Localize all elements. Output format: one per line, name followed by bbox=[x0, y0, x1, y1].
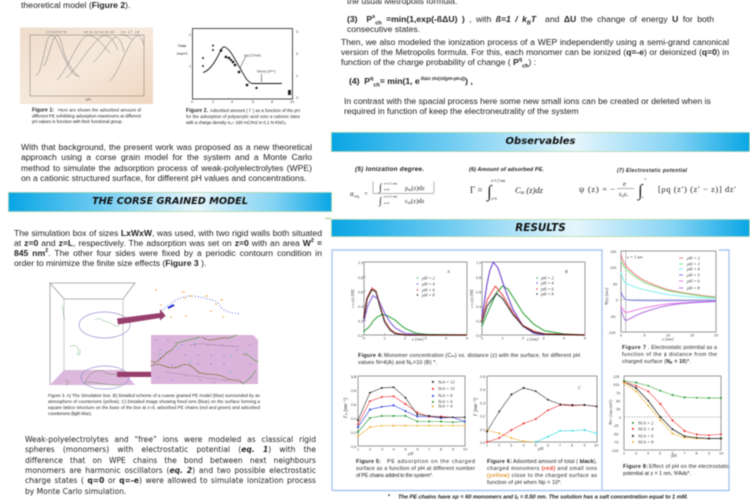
chart: figure 4B monomer concentration: B bbox=[565, 269, 568, 274]
chart: figure 7 electrostatic potential vs distance: 15 bbox=[690, 334, 694, 338]
figure 2: adsorbed amount vs pH plot: 4 bbox=[231, 100, 233, 104]
chart: figure 4A monomer concentration: 1.0 bbox=[358, 261, 363, 265]
chart: figure 4B monomer concentration: 0.6 bbox=[476, 290, 481, 294]
chart: figure 4B monomer concentration: 0.8 bbox=[476, 276, 481, 280]
heading: observables bbox=[331, 132, 750, 152]
figure 1: adsorption maxima plot: 1 2 3 4 5 6 7 8 bbox=[46, 30, 66, 34]
figure 2: adsorbed amount vs pH plot: 2 bbox=[296, 52, 298, 56]
chart: figure 6 adsorbed amount of charge: 6 bbox=[547, 444, 549, 448]
text: simulation box paragraph: The simulation box of sizes LxWxW, was used, with two rigid walls both situated bbox=[14, 228, 322, 238]
observable formula 5: ionization degree: ρ bbox=[405, 185, 408, 192]
chart: figure 4B monomer concentration: 3 bbox=[542, 336, 545, 340]
results frame bbox=[332, 250, 729, 490]
chart: figure 4A monomer concentration: pH = 2 bbox=[421, 276, 436, 280]
chart: figure 5 PE adsorption: 0.8 bbox=[351, 389, 356, 393]
observable formula 6: adsorbed PE bbox=[469, 167, 544, 202]
observable formula 7: electrostatic potential: z bbox=[642, 195, 644, 199]
chart: figure 4A monomer concentration: 3 bbox=[424, 336, 427, 340]
figure 2: adsorbed amount vs pH plot: 3 bbox=[296, 30, 298, 34]
observable formula 5: ionization degree: (z)dz bbox=[411, 185, 425, 192]
pink surface detail bbox=[151, 335, 258, 384]
figure 2 caption bbox=[186, 108, 301, 125]
chart: figure 8 potential vs pH: 8 bbox=[696, 452, 698, 456]
chart: figure 4A monomer concentration: pH = 8 bbox=[421, 292, 436, 298]
chart: figure 8 potential vs pH: -pH bbox=[670, 453, 678, 458]
chart: figure 8 potential vs pH: -25 bbox=[613, 424, 618, 428]
chart: figure 6 adsorbed amount of charge: 2 bbox=[498, 444, 500, 448]
chart: figure 4A monomer concentration: 0.0 bbox=[358, 334, 363, 338]
chart: figure 6 adsorbed amount of charge: 0.4 bbox=[480, 388, 485, 392]
chart: figure 4B monomer concentration: pH = 6 bbox=[540, 286, 555, 292]
text: small ions paragraph bbox=[344, 96, 712, 116]
chart: figure 4B monomer concentration: 0 bbox=[481, 336, 483, 340]
chart: figure 4B monomer concentration: pH = 2 bbox=[540, 276, 555, 280]
chart: figure 6 adsorbed amount of charge: Γ [nm⁻²] bbox=[473, 398, 479, 417]
chart: figure 6 adsorbed amount of charge: 1 bbox=[486, 444, 488, 448]
chart: figure 4A monomer concentration: 0.2 bbox=[358, 320, 363, 324]
chart: figure 8 potential vs pH: 125 bbox=[613, 375, 619, 379]
observable formula 6: adsorbed PE: z=0 bbox=[491, 197, 497, 201]
figure 2: adsorbed amount vs pH plot: 1 bbox=[189, 64, 191, 68]
chart: figure 8 potential vs pH: -100 bbox=[611, 449, 619, 453]
chart: figure 4B monomer concentration bbox=[469, 261, 586, 342]
observable formula 5: ionization degree: ∫ bbox=[378, 182, 383, 194]
text: simulation box paragraph: 845 nm2. The other four sides were fixed by a periodic contourn condition in bbox=[14, 248, 322, 258]
figure 3 caption bbox=[48, 393, 261, 416]
chart: figure 5 PE adsorption: 9 bbox=[452, 448, 454, 452]
chart: figure 6 adsorbed amount of charge: 4 bbox=[522, 444, 525, 448]
text: simulation box paragraph: order to minimize the finite size effects (Figure 3 ). bbox=[14, 258, 206, 268]
figure 6 caption bbox=[487, 459, 598, 486]
chart: figure 8 potential vs pH: 10 bbox=[719, 452, 723, 456]
chart: figure 7 electrostatic potential vs distance: pH = 6 bbox=[686, 278, 701, 284]
chart: figure 8 potential vs pH: 75 bbox=[616, 392, 620, 396]
chart: figure 6 adsorbed amount of charge: 0.5 bbox=[480, 375, 485, 379]
observable formula 5: ionization degree: z=2.5 nm bbox=[384, 182, 398, 186]
chart: figure 4A monomer concentration: 2 bbox=[404, 336, 406, 340]
text: weak polyelectrolytes paragraph bbox=[24, 435, 316, 496]
figure 7 caption: charged surface (Nₚ = 10)*. bbox=[622, 359, 691, 365]
text: simulation box paragraph bbox=[14, 228, 322, 268]
chart: figure 4B monomer concentration: 1.0 bbox=[476, 261, 481, 265]
text: ionization process paragraph bbox=[340, 36, 730, 70]
chart: figure 4A monomer concentration: 0.4 bbox=[358, 305, 363, 309]
text: present work paragraph: With that background, the present work was proposed as a new theoretical bbox=[21, 142, 312, 152]
figure 6 caption: charged monomers (red) and small ions bbox=[487, 466, 597, 472]
chart: figure 5 PE adsorption: 7 bbox=[428, 448, 430, 452]
chart: figure 4A monomer concentration: 0.6 bbox=[358, 290, 363, 294]
chart: figure 7 electrostatic potential vs distance: 150 bbox=[610, 250, 616, 254]
text: simulation box paragraph: at z=0 and z=L, respectively. The adsorption was set on z=0 with an area W2 = bbox=[14, 238, 322, 248]
chart: figure 4A monomer concentration: 4 bbox=[445, 336, 447, 340]
chart: figure 4B monomer concentration: 4 bbox=[563, 336, 565, 340]
equation 3: consecutive states. bbox=[347, 24, 420, 34]
figure 8 caption: Effect of pH on the electrostatic bbox=[649, 464, 729, 470]
figure 6 caption: Adsorbed amount of total ( black), bbox=[513, 459, 598, 465]
observable formula 6: adsorbed PE: (6) Amount of adsorbed PE. bbox=[469, 167, 544, 173]
chart: figure 6 adsorbed amount of charge: 0.0 bbox=[480, 441, 485, 445]
chart: figure 8 potential vs pH: -50 bbox=[613, 432, 618, 436]
chart: figure 8 potential vs pH: 25 bbox=[616, 408, 620, 412]
observable formula 5: ionization degree: m bbox=[408, 200, 412, 205]
chart: figure 5 PE adsorption: Γₚ [nm⁻²] bbox=[343, 398, 349, 419]
chart: figure 4A monomer concentration: pH = 4 bbox=[421, 282, 436, 286]
figure 6 caption: function of pH when Np = 10*. bbox=[487, 480, 562, 486]
chart: figure 5 PE adsorption: 10 bbox=[463, 448, 467, 452]
chart: figure 8 potential vs pH: 7 bbox=[684, 452, 686, 456]
figure 2: adsorbed amount vs pH plot: 2 bbox=[212, 100, 214, 104]
observable formula 5: ionization degree: m bbox=[408, 187, 412, 192]
figure 5 caption: Figure 5: bbox=[356, 459, 381, 465]
figure 5 caption: of PE chains added to the system*. bbox=[356, 473, 433, 479]
chart: figure 5 PE adsorption: 8 bbox=[440, 448, 442, 452]
chart: figure 7 electrostatic potential vs distance: 0 bbox=[616, 298, 618, 302]
chart: figure 5 PE adsorption: Nch = 12 bbox=[437, 380, 455, 384]
observable formula 5: ionization degree: z=0 bbox=[384, 188, 390, 192]
figure 2 caption: Adsorbed amount ( Γ ) as a function of the pH bbox=[210, 108, 300, 113]
chart: figure 7 electrostatic potential vs distance: z = 1 nm bbox=[626, 254, 643, 260]
chart: figure 4B monomer concentration: pH = 8 bbox=[540, 292, 555, 296]
chart: figure 7 electrostatic potential vs distance: pH = 2 bbox=[686, 256, 701, 260]
observable formula 6: adsorbed PE: ∫ bbox=[486, 182, 493, 202]
observable formula 5: ionization degree bbox=[350, 166, 434, 207]
figure 5 caption: surface as a function of pH at different number bbox=[356, 466, 475, 472]
chart: figure 4A monomer concentration: pH = 6 bbox=[421, 288, 436, 292]
chart: figure 5 PE adsorption: 2 bbox=[369, 448, 371, 452]
figure 1: adsorption maxima plot: 16 17 18 bbox=[121, 30, 139, 34]
text: present work paragraph: method to simulate the adsorption process of weak-polyelectrolytes (WPE) bbox=[21, 163, 312, 173]
chart: figure 8 potential vs pH: NCh = 6 bbox=[637, 434, 654, 438]
chart: figure 8 potential vs pH bbox=[608, 375, 723, 458]
chart: figure 7 electrostatic potential vs distance: -50 bbox=[610, 315, 616, 319]
chart: figure 8 potential vs pH: 0 bbox=[619, 416, 621, 420]
observable formula 5: ionization degree: eq. bbox=[354, 194, 360, 198]
figure 3 caption: atmosphere of counterions (yellow). C) Detailed image showing fixed ions (blue) on the surface forming a bbox=[48, 399, 261, 404]
chart: figure 4B monomer concentration: 0.4 bbox=[476, 305, 481, 309]
figure 4 caption: Figure 4: bbox=[358, 353, 383, 359]
chart: figure 4B monomer concentration: cₘ (z) [M] bbox=[469, 289, 474, 308]
chart: figure 4B monomer concentration: 0.0 bbox=[476, 334, 481, 338]
chart: figure 5 PE adsorption: Nch = 4 bbox=[437, 404, 453, 408]
chart: figure 5 PE adsorption: 3 bbox=[381, 448, 383, 452]
figure 2: adsorbed amount vs pH plot: exp (Γmax) bbox=[244, 54, 261, 58]
figure 2: adsorbed amount vs pH plot: 0 bbox=[296, 96, 298, 100]
chart: figure 7 electrostatic potential vs distance: 100 bbox=[610, 266, 616, 270]
observable formula 5: ionization degree: z=2.5 nm bbox=[384, 194, 398, 198]
chart: figure 5 PE adsorption: 1.0 bbox=[351, 375, 356, 379]
figure 2 caption: with a charge density σ₀= 160 mC/m2 in 0.1 N KNO₃ bbox=[186, 120, 286, 125]
figure 1: adsorption maxima plot: pH bbox=[86, 98, 91, 102]
figure 3: simulation box schematic bbox=[50, 283, 258, 389]
observable formula 7: electrostatic potential: − bbox=[610, 184, 615, 194]
figure 1 caption: different PE exhibiting adsorption maximums at different bbox=[32, 114, 142, 118]
observable formula 7: electrostatic potential: e bbox=[623, 180, 626, 188]
observable formula 5: ionization degree: c bbox=[405, 198, 408, 205]
chart: figure 8 potential vs pH: 3 bbox=[635, 452, 637, 456]
chart: figure 6 adsorbed amount of charge: 5 bbox=[534, 444, 537, 448]
chart: figure 4A monomer concentration: 1 bbox=[384, 336, 386, 340]
chart: figure 8 potential vs pH: -75 bbox=[613, 440, 618, 444]
text: present work paragraph: on a cationic structured surface, for different pH values and concentrations. bbox=[21, 173, 307, 183]
figure 8 caption bbox=[623, 464, 729, 477]
figure 6 caption: (yellow) close to the charged surface as bbox=[487, 473, 597, 479]
figure 2: adsorbed amount vs pH plot bbox=[177, 28, 298, 104]
chart: figure 5 PE adsorption: pH bbox=[407, 451, 414, 456]
chart: figure 5 PE adsorption: 6 bbox=[416, 448, 419, 452]
figure 1: adsorption maxima plot bbox=[20, 28, 153, 104]
chart: figure 7 electrostatic potential vs distance: pH = 3 bbox=[686, 262, 701, 266]
figure 2 caption: Figure 2. bbox=[186, 108, 209, 114]
figure 2: adsorbed amount vs pH plot: 0 bbox=[191, 100, 193, 104]
figure 2: adsorbed amount vs pH plot: 8 bbox=[271, 100, 273, 104]
chart: figure 4A monomer concentration: A bbox=[446, 269, 450, 274]
observable formula 7: electrostatic potential: ∫ bbox=[637, 181, 644, 201]
chart: figure 6 adsorbed amount of charge: 8 bbox=[571, 444, 573, 448]
chart: figure 7 electrostatic potential vs distance: pH = 5 bbox=[686, 272, 701, 278]
chart: figure 8 potential vs pH: 6 bbox=[672, 452, 674, 456]
figure 2: adsorbed amount vs pH plot: theory (αᴹᵃˣ) bbox=[257, 70, 276, 74]
chart: figure 6 adsorbed amount of charge bbox=[473, 375, 598, 451]
chart: figure 6 adsorbed amount of charge: 0.2 bbox=[480, 414, 485, 418]
observable formula 5: ionization degree: α bbox=[350, 190, 354, 198]
chart: figure 7 electrostatic potential vs distance: -100 bbox=[608, 331, 616, 335]
chart: figure 8 potential vs pH: 50 bbox=[616, 400, 620, 404]
figure 2: adsorbed amount vs pH plot: [mg/m²] bbox=[177, 52, 187, 56]
chart: figure 7 electrostatic potential vs distance: 20 bbox=[714, 334, 718, 338]
observable formula 7: electrostatic potential: ε₀εᵣ bbox=[619, 191, 629, 198]
chart: figure 8 potential vs pH: 9 bbox=[708, 452, 710, 456]
heading: the corse grained model bbox=[8, 192, 332, 212]
figure 3 caption: Figure 3. A) The Simulation box. B) Detailed scheme of a coarse grained PE model (blue) surrounded by an bbox=[48, 393, 261, 398]
chart: figure 6 adsorbed amount of charge: 10 bbox=[594, 444, 598, 448]
chart: figure 5 PE adsorption: Nch = 10 bbox=[437, 386, 455, 391]
chart: figure 5 PE adsorption: 1 bbox=[357, 448, 359, 452]
observable formula 6: adsorbed PE: Γ = bbox=[470, 185, 483, 195]
chart: figure 4B monomer concentration: 1 bbox=[502, 336, 504, 340]
chart: figure 4B monomer concentration: z [nm] bbox=[526, 336, 539, 342]
chart: figure 8 potential vs pH: 5 bbox=[659, 452, 661, 456]
chart: figure 7 electrostatic potential vs distance: Ψ(z) [mv] bbox=[604, 287, 609, 305]
chart: figure 6 adsorbed amount of charge: 0.1 bbox=[480, 428, 485, 432]
text: weak polyelectrolytes paragraph: difference that on WPE chains the bond between next neighbours bbox=[25, 456, 316, 465]
chart: figure 5 PE adsorption: 5 bbox=[404, 448, 407, 452]
chart: figure 8 potential vs pH: Ψz=1nm (mV) bbox=[608, 399, 613, 425]
figure 4 caption: Monomer concentration (Cₘ) vs. distance (z) with the surface, for different pH bbox=[384, 353, 580, 359]
figure 2 caption: for the adsorption of polyacrylic acid onto a cationic latex bbox=[186, 114, 301, 119]
observable formula 7: electrostatic potential: [ρq (z′) (z′ − z)] dz′ bbox=[658, 184, 736, 194]
figure 2: adsorbed amount vs pH plot: Γmax bbox=[178, 44, 187, 48]
chart: figure 7 electrostatic potential vs distance: z [nm] bbox=[661, 336, 674, 342]
chart: figure 7 electrostatic potential vs distance: pH = 4 bbox=[686, 266, 701, 272]
chart: figure 4A monomer concentration: cₘ (z) [M] bbox=[350, 289, 355, 308]
chart: figure 4B monomer concentration: pH = 4 bbox=[540, 280, 555, 286]
chart: figure 4B monomer concentration: 0.2 bbox=[476, 320, 481, 324]
footnote: * bbox=[388, 494, 391, 500]
chart: figure 4A monomer concentration: 5 bbox=[466, 336, 468, 340]
text: weak polyelectrolytes paragraph: charge states ( q=0 or q=-e) were allowed to simulate ionization process bbox=[25, 476, 316, 485]
chart: figure 7 electrostatic potential vs distance: pH = 8 bbox=[686, 286, 701, 290]
observable formula 5: ionization degree: = bbox=[364, 190, 368, 198]
chart: figure 4B monomer concentration: 5 bbox=[584, 336, 586, 340]
chart: figure 5 PE adsorption: 4 bbox=[392, 448, 395, 452]
figure 4 caption: values N=4(A) and Nₚ=10 (B) *. bbox=[358, 360, 437, 366]
chart: figure 7 electrostatic potential vs distance: 0 bbox=[620, 334, 622, 338]
text: small ions paragraph: required in function of keep the electroneutrality of the system bbox=[344, 106, 579, 116]
observable formula 7: electrostatic potential: (7) Electrostatic potential bbox=[617, 168, 688, 174]
equation 4: (4) Pq ch= min(1, e-ßΔU ±ln(10(pH-pKa))) , bbox=[349, 76, 473, 89]
observable formula 7: electrostatic potential: ∞ bbox=[644, 177, 647, 181]
text: small ions paragraph: In contrast with the spacial process here some new small ions can be created or deleted when is bbox=[344, 96, 711, 106]
blue PE chain detail bbox=[155, 290, 240, 317]
heading: results: RESULTS bbox=[515, 222, 566, 234]
chart: figure 5 PE adsorption: 0.6 bbox=[351, 403, 356, 407]
figure 7 caption: Figure 7 bbox=[622, 345, 646, 351]
observable formula 6: adsorbed PE: (z)dz bbox=[524, 185, 544, 195]
observable formula 6: adsorbed PE: C bbox=[515, 185, 521, 195]
chart: figure 8 potential vs pH: 2 bbox=[623, 452, 625, 456]
observable formula 5: ionization degree: z=0 bbox=[384, 201, 390, 205]
text: ionization process paragraph: Then, we also modeled the ionization process of a WEP independently using a semi-grand canonical bbox=[341, 36, 729, 46]
figure 3 caption: counterions (ligth blue). bbox=[48, 411, 92, 416]
chart: figure 7 electrostatic potential vs distance: 10 bbox=[666, 334, 670, 338]
figure 2: adsorbed amount vs pH plot: 10 bbox=[290, 100, 294, 104]
chart: figure 4A monomer concentration: 0 bbox=[363, 336, 365, 340]
observable formula 5: ionization degree: ∫ bbox=[378, 196, 383, 207]
text: weak polyelectrolytes paragraph: monomers are harmonic oscillators (eq. 2) and two possible electrostatic bbox=[25, 466, 316, 475]
text: intro end: theoretical model (Figure 2). bbox=[21, 0, 130, 10]
chart: figure 6 adsorbed amount of charge: 9 bbox=[584, 444, 586, 448]
figure 5 caption bbox=[356, 459, 475, 479]
chart: figure 6 adsorbed amount of charge: C bbox=[578, 385, 581, 390]
chart: figure 5 PE adsorption: Nch = 8 bbox=[437, 393, 453, 398]
heading: observables: Observables bbox=[506, 136, 575, 147]
observable formula 7: electrostatic potential bbox=[579, 168, 736, 201]
chart: figure 6 adsorbed amount of charge: 7 bbox=[559, 444, 561, 448]
chart: figure 6 adsorbed amount of charge: 0.3 bbox=[480, 402, 485, 406]
heading: the corse grained model: THE CORSE GRAINED MODEL bbox=[92, 196, 248, 207]
chart: figure 8 potential vs pH: 100 bbox=[613, 383, 619, 387]
chart: figure 5 PE adsorption bbox=[343, 375, 467, 456]
figure 1 caption: Here are shown the adsorbed amount of bbox=[58, 108, 142, 112]
text: present work paragraph: approach using a corse grain model for the system and a Monte Carlo bbox=[21, 152, 312, 162]
figure 7 caption: . Electrostatic potential as a bbox=[648, 345, 717, 351]
observable formula 5: ionization degree: (z)dz bbox=[411, 198, 424, 205]
chart: figure 5 PE adsorption: Nch = 6 bbox=[437, 399, 453, 404]
figure 2: adsorbed amount vs pH plot: 6 bbox=[252, 100, 254, 104]
chart: figure 5 PE adsorption: 0.2 bbox=[351, 431, 356, 435]
heading: results bbox=[331, 219, 750, 237]
chart: figure 8 potential vs pH: 4 bbox=[647, 452, 649, 456]
equation 3 bbox=[346, 14, 714, 34]
chart: figure 4B monomer concentration: 2 bbox=[522, 336, 524, 340]
figure 7 caption: function of the z distance from the bbox=[622, 352, 717, 358]
text: ionization process paragraph: function of the charge probability of change ( Pq ch) : bbox=[341, 57, 536, 70]
chart: figure 5 PE adsorption: 0.4 bbox=[351, 417, 356, 421]
chart: figure 7 electrostatic potential vs distance: 5 bbox=[644, 334, 646, 338]
chart: figure 7 electrostatic potential vs distance bbox=[604, 250, 718, 342]
figure 8 caption: potential at z = 1 nm, ΨAds*. bbox=[623, 471, 691, 477]
figure 3 caption: square lattice structure on the base of the box at z=0, adsorbed PE chains (red and green) and adsorbed bbox=[48, 405, 261, 410]
chart: figure 6 adsorbed amount of charge: pH bbox=[537, 446, 544, 451]
chart: figure 4A monomer concentration: z [nm] bbox=[411, 336, 424, 342]
figure 8 caption: Figure 8: bbox=[623, 464, 648, 470]
figure 1 caption bbox=[32, 108, 142, 124]
figure 6 caption: Figure 6: bbox=[487, 459, 512, 465]
text: weak polyelectrolytes paragraph: by Monte Carlo simulation. bbox=[25, 487, 126, 496]
text: present work paragraph bbox=[20, 142, 312, 184]
chart: figure 4A monomer concentration bbox=[350, 261, 468, 342]
chart: figure 8 potential vs pH: NCh = 4 bbox=[637, 426, 654, 432]
observable formula 5: ionization degree: (5) Ionization degree. bbox=[355, 166, 424, 173]
observable formula 6: adsorbed PE: z=1.5 nm bbox=[491, 179, 505, 183]
text: weak polyelectrolytes paragraph: spheres (monomers) with electrostatic potential (eq. 1) with the bbox=[25, 445, 316, 454]
figure 2: adsorbed amount vs pH plot: 1 bbox=[296, 74, 298, 78]
chart: figure 5 PE adsorption: 0.0 bbox=[351, 445, 356, 449]
text: weak polyelectrolytes paragraph: Weak-polyelectrolytes and “free” ions were modeled as classical rigid bbox=[25, 435, 316, 444]
text: ionization process paragraph: version of the Metropolis formula. For this, each monomer can be ionized (q=-e) or deionized (q=0) in bbox=[341, 47, 729, 57]
equation 3: (3) Ps ch =min(1,exp(-ßΔU) ) , with ß=1 / kBT and ΔU the change of energy U for both bbox=[347, 14, 714, 27]
figure 1 caption: Figure 1: bbox=[32, 108, 54, 114]
chart: figure 6 adsorbed amount of charge: 3 bbox=[510, 444, 512, 448]
observable formula 7: electrostatic potential: ψ (z) = bbox=[579, 184, 607, 194]
figure 5 caption: PE adsorption on the charged bbox=[387, 459, 475, 465]
figure 7 caption bbox=[622, 345, 717, 365]
chart: figure 8 potential vs pH: NCh = 8 bbox=[637, 440, 654, 444]
figure 1: adsorption maxima plot: 10 11 12 13 14 15 bbox=[84, 30, 114, 34]
observable formula 6: adsorbed PE: m bbox=[521, 191, 525, 196]
figure 4 caption bbox=[358, 353, 580, 366]
chart: figure 7 electrostatic potential vs distance: 50 bbox=[613, 282, 617, 286]
figure 1 caption: pH values in function with their functional group . bbox=[32, 119, 124, 124]
chart: figure 4A monomer concentration: 0.8 bbox=[358, 276, 363, 280]
chart: figure 8 potential vs pH: NCh = 2 bbox=[637, 420, 654, 426]
figure 2: adsorbed amount vs pH plot: 2 bbox=[189, 33, 191, 37]
